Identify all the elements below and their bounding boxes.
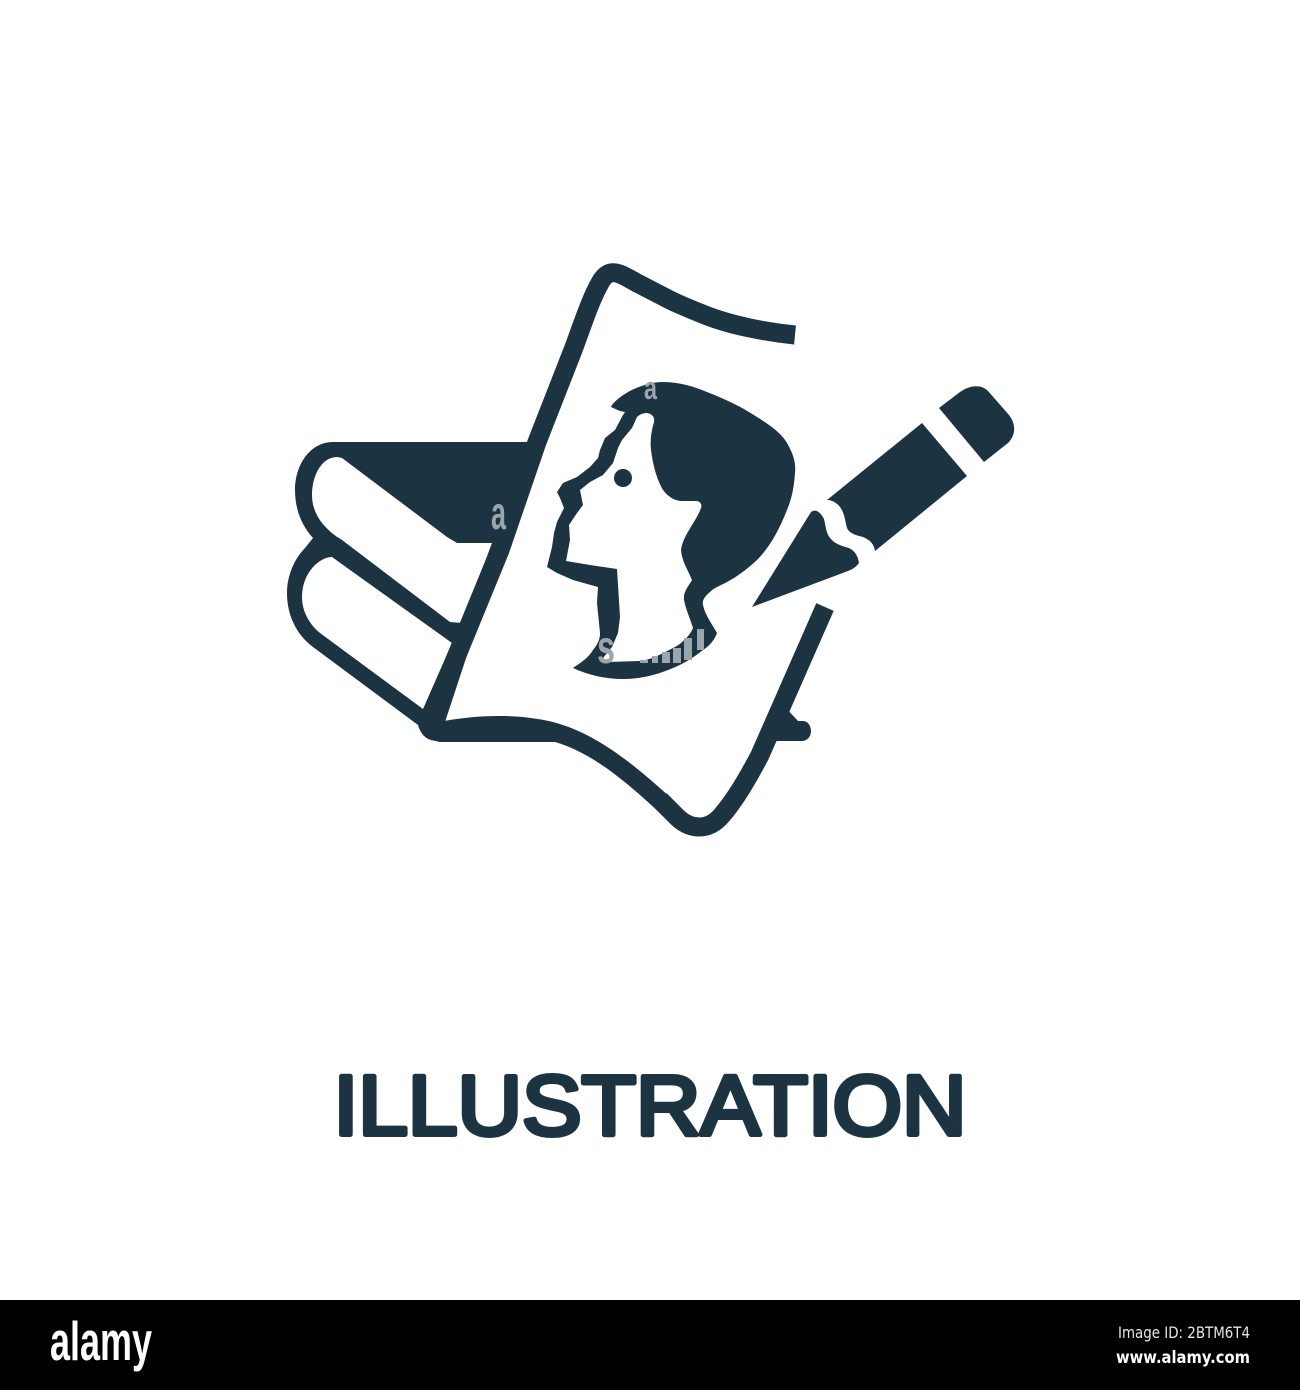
pencil body: [827, 423, 967, 551]
icon: hand holding paper: [287, 442, 537, 742]
footer bar: [0, 1300, 1300, 1390]
icon: pencil: [752, 386, 1014, 607]
watermark fragments: s: [597, 621, 615, 673]
icon: eye: [614, 469, 632, 487]
pencil eraser: [939, 386, 1014, 462]
footer logo: alamy: [50, 1310, 152, 1372]
watermark fragments: [491, 370, 704, 673]
title: ILLUSTRATION: [334, 1058, 966, 1152]
watermark fragments: a: [644, 370, 657, 406]
icon: portrait head: [547, 382, 795, 679]
watermark fragments: a: [491, 487, 506, 539]
image id: Image ID: 2BTM6T4: [1118, 1323, 1250, 1342]
icon: paper sheet outline: [432, 273, 825, 827]
icon: illustration: [287, 273, 1014, 827]
pencil tip: [752, 511, 859, 607]
website: www.alamy.com: [1116, 1348, 1250, 1368]
